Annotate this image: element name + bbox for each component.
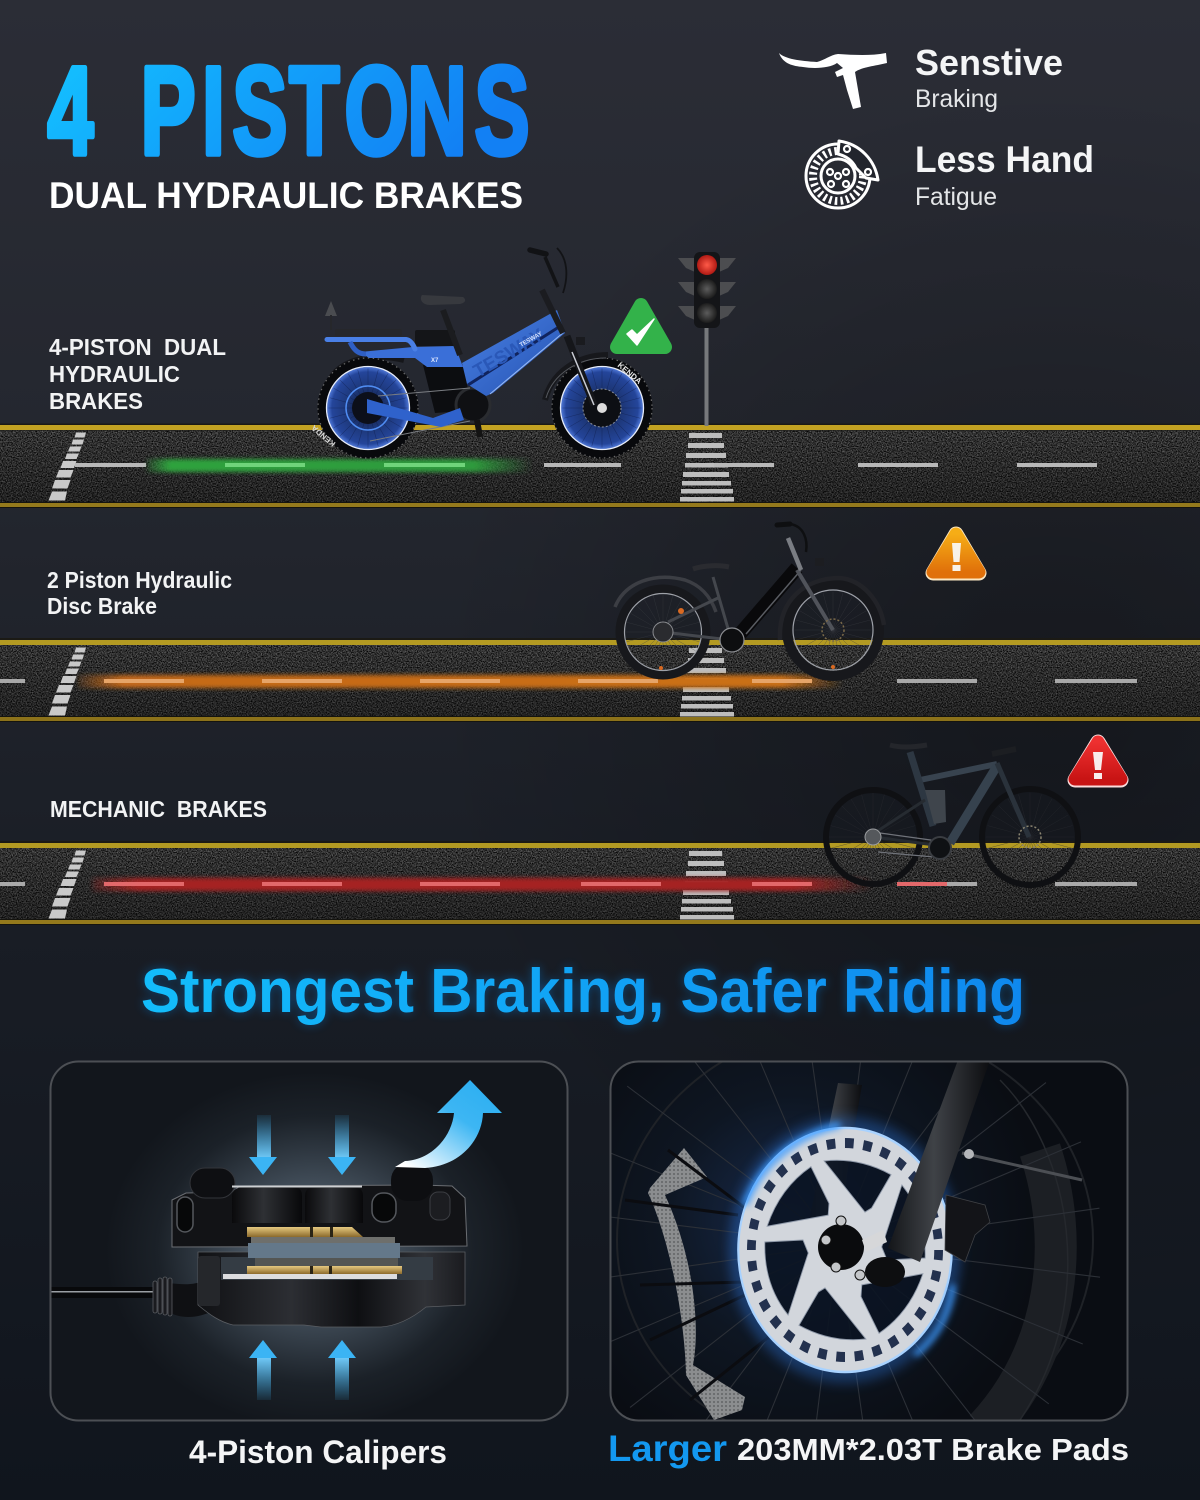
subtitle: dual hydraulic brakes: DUAL HYDRAULIC BRAKES (49, 175, 523, 216)
blue frame: X7 (431, 358, 439, 364)
feature: less hand fatigue: Fatigue (915, 183, 997, 211)
road 2 (0, 638, 1200, 722)
blue frame: TESWAY (519, 331, 543, 349)
front wheel: KENDA (616, 361, 643, 386)
brake cable (50, 1277, 215, 1317)
rotor blue glow (745, 1125, 953, 1355)
main fork tube (888, 1060, 990, 1262)
tire and rim (616, 1062, 1094, 1420)
curved heat arrow (395, 1080, 502, 1168)
rear wheel: KENDA (310, 423, 337, 448)
feature: sensitive braking (915, 42, 1063, 113)
front wheel (552, 358, 652, 458)
rack, seat, handlebar (325, 248, 585, 355)
heading: strongest braking: Strongest Braking, Safer Riding (141, 957, 1025, 1026)
brake rotor (729, 1117, 961, 1383)
panel: 4-piston caliper (50, 1061, 568, 1421)
caliper lower half (198, 1243, 465, 1327)
road 2 label (47, 567, 232, 619)
road 1 label (49, 334, 226, 414)
feature: sensitive braking: Senstive (915, 42, 1063, 83)
road 3 (0, 841, 1200, 925)
feature: sensitive braking: Braking (915, 85, 998, 113)
caption: larger brake pads: Larger (608, 1428, 727, 1469)
black spokes (625, 1149, 770, 1400)
green braking distance glow (147, 459, 532, 472)
battery and drivetrain (370, 330, 490, 441)
blue frame: TESWAY (470, 325, 548, 382)
title: 4 PISTONS: 4 PISTONS (48, 42, 530, 181)
caption: 4-piston calipers: 4-Piston Calipers (189, 1434, 447, 1470)
wheel spokes (612, 1062, 1100, 1420)
icon: brake lever (779, 53, 887, 109)
feature: less hand fatigue (915, 139, 1094, 211)
hub and axle (818, 1216, 905, 1287)
blue frame (327, 310, 565, 427)
fenders behind wheels (329, 357, 404, 382)
rear fork tube (828, 1083, 862, 1128)
caption: larger brake pads: 203MM*2.03T Brake Pads (737, 1432, 1129, 1467)
road 3 label: MECHANIC BRAKES (50, 796, 267, 822)
traffic light (678, 252, 736, 426)
icon: red warning triangle (1075, 742, 1121, 780)
pressure arrows (249, 1115, 356, 1400)
icon: green check triangle (617, 305, 665, 347)
bike: mechanical brake grey bike (826, 745, 1078, 885)
bike: 2-piston black e-bike (615, 524, 884, 676)
rear wheel (310, 358, 418, 458)
caption: larger brake pads (608, 1428, 1129, 1469)
heading: strongest braking: Strongest Braking, Safer Riding (141, 957, 1025, 1026)
road 1 label: 4-PISTON DUAL (49, 334, 226, 360)
panel: brake disc close-up (610, 1060, 1128, 1422)
road 1 label: BRAKES (49, 388, 143, 414)
icon: brake disc (806, 141, 878, 208)
road 1 label: HYDRAULIC (49, 361, 180, 387)
road 2 label: Disc Brake (47, 593, 157, 619)
caliper upper half (172, 1163, 467, 1247)
icon: orange warning triangle (933, 534, 979, 573)
front fender and fork (545, 336, 608, 405)
orange braking distance glow (78, 675, 843, 688)
feature: less hand fatigue: Less Hand (915, 139, 1094, 180)
road 1 (0, 424, 1200, 508)
road 2 label: 2 Piston Hydraulic (47, 567, 232, 593)
fender reflector (648, 1148, 745, 1420)
bike: blue 4-piston e-bike (310, 248, 652, 458)
mount caliper and stick (945, 1149, 1082, 1262)
red braking distance glow (92, 878, 947, 891)
